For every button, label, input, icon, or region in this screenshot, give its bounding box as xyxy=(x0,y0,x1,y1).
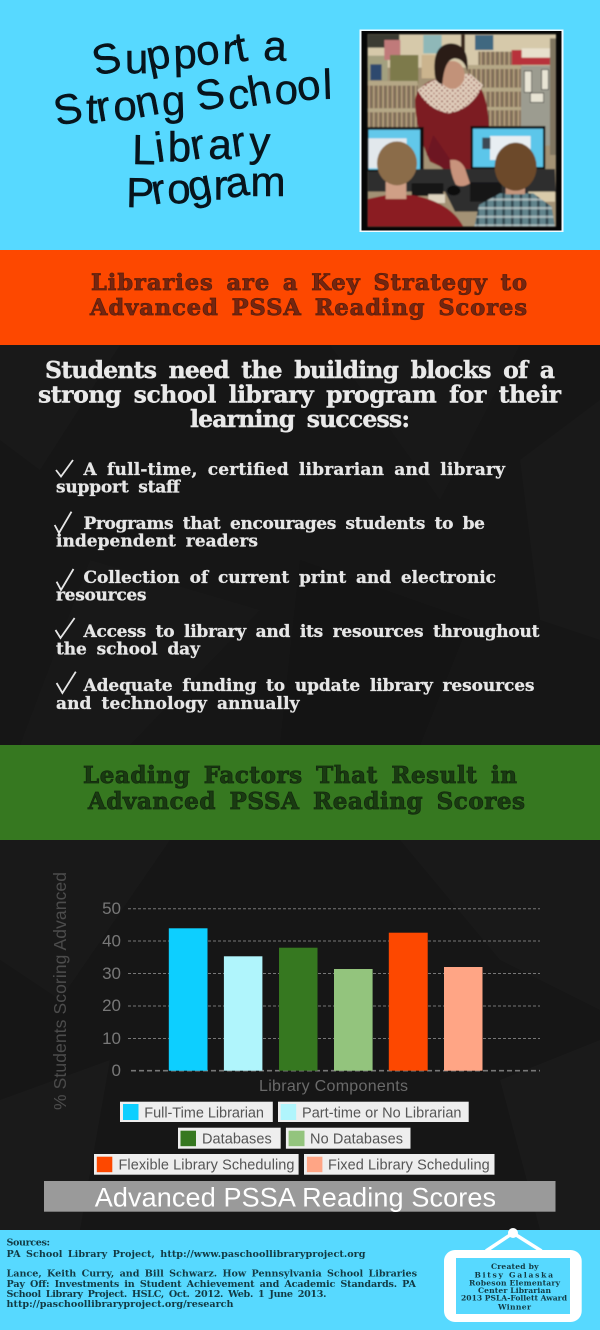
y axis ticks: 40 xyxy=(102,932,121,950)
heading: students need building blocks: Students need the building blocks of a xyxy=(45,356,555,384)
y axis ticks: 10 xyxy=(102,1029,121,1048)
bar chart xyxy=(50,872,540,1110)
y axis ticks xyxy=(102,899,121,1080)
checklist xyxy=(55,460,540,714)
chart legend: Flexible Library Scheduling xyxy=(118,1158,294,1174)
heading: libraries key strategy xyxy=(89,270,527,321)
chart legend: Fixed Library Scheduling xyxy=(328,1158,490,1174)
list item: collection: Collection of current print and electronic xyxy=(84,568,496,588)
list item: independent readers: Programs that encourages students to be xyxy=(84,514,485,534)
list item: collection: resources xyxy=(56,586,146,606)
chart banner: Advanced PSSA Reading Scores xyxy=(95,1182,496,1212)
hanging sign: credits: Created by xyxy=(491,1262,539,1271)
list item: access: Access to library and its resources throughout xyxy=(82,622,540,642)
hand xyxy=(450,160,470,186)
title: Strong School xyxy=(49,57,336,138)
list item: full-time librarian: support staff xyxy=(56,478,181,498)
hanging sign: credits: Robeson Elementary xyxy=(469,1278,561,1287)
y axis ticks: 20 xyxy=(102,996,121,1015)
panel: header background xyxy=(0,0,600,250)
list item: collection xyxy=(56,568,496,606)
left boy xyxy=(368,195,463,227)
hanging sign: credits xyxy=(444,1228,582,1322)
panel: footer xyxy=(0,1228,600,1330)
list item: full-time librarian xyxy=(56,460,506,498)
title: Library xyxy=(128,115,274,175)
list item: access xyxy=(56,618,540,660)
panel: green heading band xyxy=(0,745,600,840)
heading: libraries key strategy: Libraries are a Key Strategy to xyxy=(91,270,527,296)
right monitor xyxy=(471,126,545,170)
heading: students need building blocks: learning success: xyxy=(190,405,410,433)
right boy xyxy=(474,193,555,227)
heading: leading factors: Advanced PSSA Reading Scores xyxy=(87,788,525,815)
hanging sign: credits: 2013 PSLA-Follett Award xyxy=(461,1294,568,1303)
list item: funding: Adequate funding to update library resources xyxy=(82,676,534,696)
x axis title: Library Components xyxy=(259,1078,408,1095)
list item: funding xyxy=(56,672,534,714)
woman xyxy=(415,75,489,173)
chart legend: Full-Time Librarian xyxy=(144,1105,264,1121)
sources text xyxy=(6,1238,417,1310)
hanging sign: credits: Bitsy Galaska xyxy=(474,1270,553,1279)
chart legend: Databases xyxy=(202,1131,272,1147)
bars xyxy=(169,928,483,1071)
chart legend xyxy=(94,1102,494,1175)
sources text: PA School Library Project, http://www.paschoollibraryproject.org xyxy=(6,1249,366,1260)
y axis ticks: 50 xyxy=(102,899,121,918)
hanging sign: credits: Center Librarian xyxy=(478,1286,551,1295)
sources text: Lance, Keith Curry, and Bill Schwarz. How Pennsylvania School Libraries xyxy=(6,1269,417,1280)
y axis title: % Students Scoring Advanced xyxy=(50,872,70,1110)
sources text: Sources: xyxy=(6,1238,50,1249)
list item: independent readers xyxy=(55,512,485,552)
title xyxy=(49,16,336,219)
left monitor xyxy=(368,127,424,172)
list item: independent readers: independent readers xyxy=(56,532,258,552)
y axis ticks: 0 xyxy=(112,1061,121,1080)
sources text: Pay Off: Investments in Student Achievement and Academic Standards. PA xyxy=(6,1279,417,1290)
list item: full-time librarian: A full-time, certified librarian and library xyxy=(82,460,506,480)
list item: funding: and technology annually xyxy=(56,694,301,714)
heading: libraries key strategy: Advanced PSSA Reading Scores xyxy=(89,295,527,321)
y axis ticks: 30 xyxy=(102,964,121,983)
heading: leading factors: Leading Factors That Result in xyxy=(83,762,517,789)
hanging sign: credits: Winner xyxy=(497,1302,532,1311)
title: Support a xyxy=(87,16,293,89)
photo: librarian helping two students xyxy=(360,30,564,232)
heading: students need building blocks xyxy=(38,356,562,433)
chart legend: No Databases xyxy=(310,1131,403,1147)
panel: dark chart section xyxy=(0,840,600,1230)
sources text: School Library Project. HSLC, Oct. 2012. Web. 1 June 2013. xyxy=(6,1289,326,1300)
title: Program xyxy=(122,153,290,219)
panel: orange heading band xyxy=(0,250,600,345)
list item: access: the school day xyxy=(56,640,201,660)
heading: students need building blocks: strong school library program for their xyxy=(38,380,562,408)
panel: dark building blocks section xyxy=(0,345,600,745)
sources text: http://paschoollibraryproject.org/research xyxy=(6,1299,234,1310)
desk xyxy=(368,169,556,212)
chart legend: Part-time or No Librarian xyxy=(302,1105,462,1121)
heading: leading factors xyxy=(83,762,525,815)
